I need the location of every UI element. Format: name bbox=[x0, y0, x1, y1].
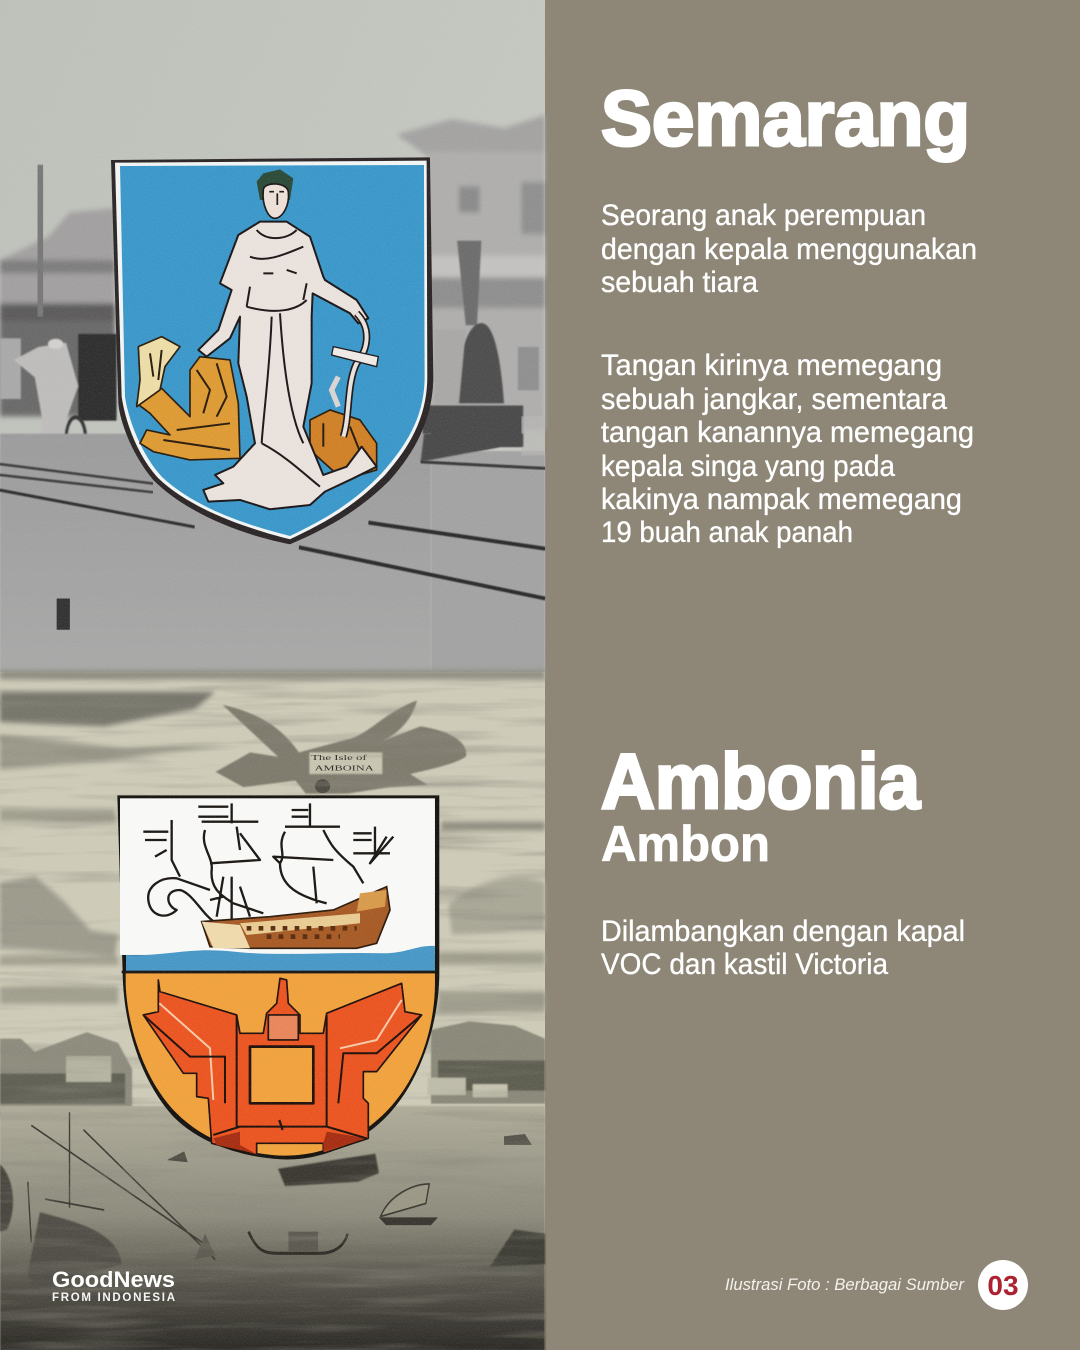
text block: Semarang description 1: dengan kepala menggunakan bbox=[601, 233, 977, 266]
shield: Semarang coat of arms bbox=[111, 157, 433, 544]
photo credit: Ilustrasi Foto : Berbagai Sumber bbox=[725, 1275, 965, 1294]
text block: Semarang description 2: Tangan kirinya memegang bbox=[601, 349, 942, 382]
text block: Semarang description 1: sebuah tiara bbox=[601, 266, 758, 299]
shield: Ambon coat of arms bbox=[117, 795, 439, 1159]
right background panel bbox=[545, 0, 1080, 1350]
logo: GoodNews from Indonesia: FROM INDONESIA bbox=[52, 1292, 175, 1304]
red fort bbox=[143, 978, 422, 1155]
anchor bbox=[332, 313, 378, 437]
water band bbox=[126, 946, 435, 972]
text block: Semarang description 2 bbox=[601, 349, 974, 549]
bollard bbox=[57, 599, 70, 630]
orange field bbox=[126, 973, 435, 1156]
sea bbox=[0, 1106, 545, 1350]
photo: Semarang street scene bbox=[0, 0, 545, 680]
ship hull bbox=[202, 887, 390, 948]
ship sails and rigging bbox=[143, 803, 393, 923]
text block: Semarang description 2: kepala singa yang pada bbox=[601, 450, 895, 483]
figure drapery lines bbox=[247, 230, 320, 487]
head and wreath bbox=[257, 169, 293, 218]
text block: Ambon description bbox=[601, 915, 965, 981]
cloud streaks bbox=[0, 670, 545, 1013]
Isle of Amboina cartouche: The Isle of bbox=[311, 754, 368, 762]
logo: GoodNews from Indonesia bbox=[52, 1267, 175, 1304]
dark island below shield bbox=[278, 1154, 379, 1186]
engraving streak texture bbox=[0, 672, 545, 1350]
text block: Semarang description 1 bbox=[601, 199, 977, 299]
building left bbox=[0, 208, 115, 416]
heading: Semarang: Semarang bbox=[601, 74, 970, 162]
robed figure bbox=[198, 222, 377, 509]
building right bbox=[396, 115, 545, 429]
text block: Ambon description: VOC dan kastil Victoria bbox=[601, 948, 888, 981]
logo: GoodNews from Indonesia: GoodNews bbox=[52, 1267, 175, 1292]
steam tram right bbox=[421, 241, 539, 462]
lion and flag bbox=[137, 337, 377, 480]
text block: Semarang description 2: 19 buah anak panah bbox=[601, 516, 853, 549]
tram and rider left bbox=[0, 334, 116, 459]
boats bbox=[167, 1134, 545, 1266]
Isle of Amboina cartouche: AMBOINA bbox=[315, 764, 375, 773]
text block: Semarang description 2: sebuah jangkar, sementara bbox=[601, 383, 947, 416]
heading: Ambonia: Ambonia bbox=[601, 737, 921, 825]
film grain over photos bbox=[0, 0, 545, 1350]
shield body bbox=[111, 157, 433, 544]
distant land and town bbox=[0, 1021, 545, 1117]
pole bbox=[38, 165, 43, 317]
text block: Semarang description 2: kakinya nampak memegang bbox=[601, 483, 962, 516]
photo: Ambon harbour engraving bbox=[0, 670, 545, 1350]
road bbox=[0, 434, 431, 680]
white field bbox=[120, 798, 435, 955]
page number badge bbox=[978, 1260, 1028, 1310]
subheading: Ambon: Ambon bbox=[601, 816, 770, 872]
text block: Semarang description 1: Seorang anak perempuan bbox=[601, 199, 926, 232]
shield outline bbox=[117, 795, 439, 1159]
text block: Semarang description 2: tangan kanannya memegang bbox=[601, 416, 974, 449]
text block: Ambon description: Dilambangkan dengan kapal bbox=[601, 915, 965, 948]
ship left bbox=[0, 1112, 216, 1290]
page number badge: 03 bbox=[987, 1270, 1019, 1301]
Isle of Amboina cartouche bbox=[216, 700, 466, 794]
